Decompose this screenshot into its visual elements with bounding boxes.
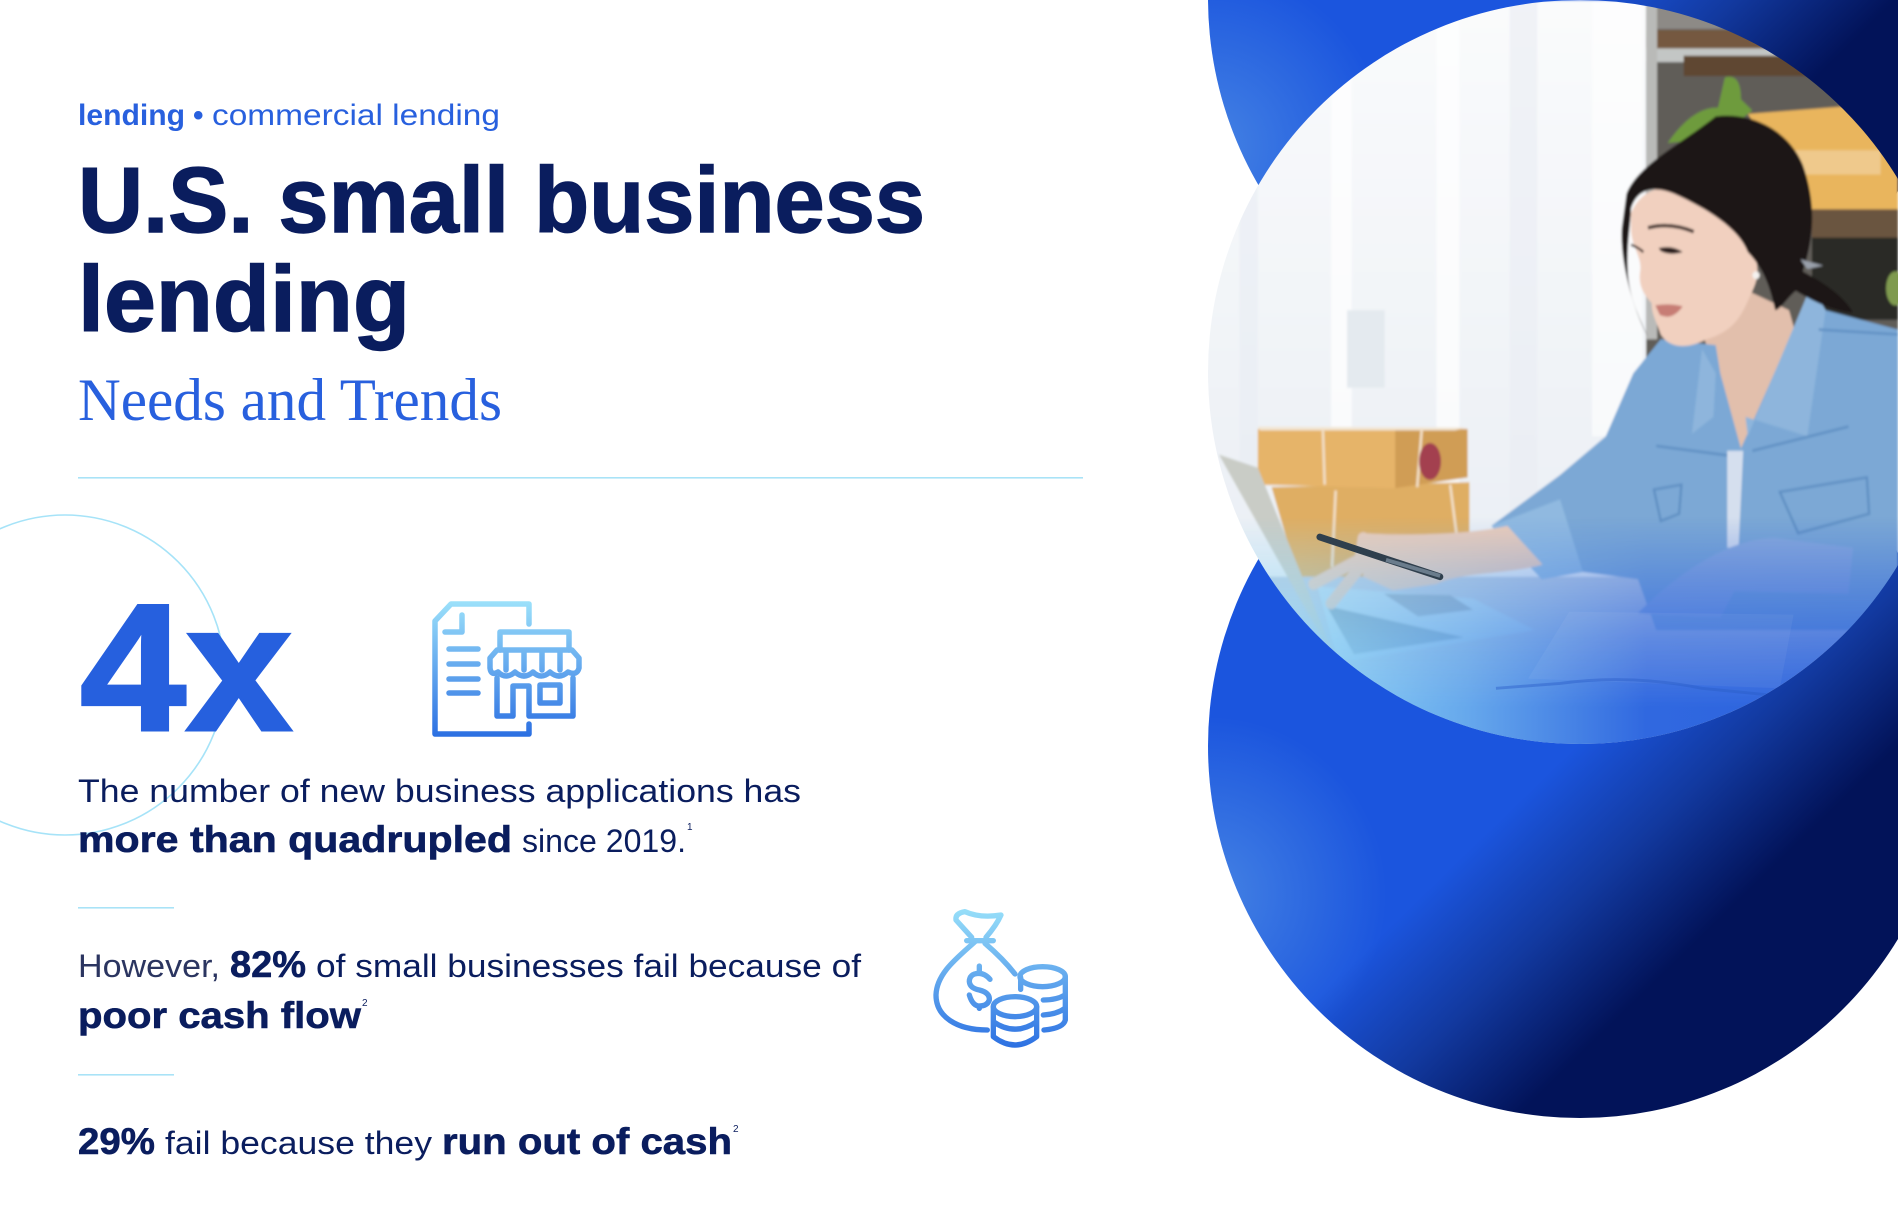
top blue circle <box>1208 0 1898 370</box>
subtitle: Needs and Trends <box>78 367 502 433</box>
text: poor cash flow: poor cash flow <box>78 995 361 1036</box>
photo: woman working at laptop with parcels <box>1180 0 1898 760</box>
text: run out of cash: run out of cash <box>442 1121 732 1162</box>
text: poor cash flow <box>78 944 861 1036</box>
category label: commercial lending <box>212 99 500 132</box>
title: lending <box>78 247 410 351</box>
category label <box>78 99 500 132</box>
text: poor cash flow: 82% <box>230 944 306 985</box>
text: new business applications: 1 <box>687 822 693 833</box>
text: run out of cash <box>78 1121 739 1162</box>
text: new business applications: The number of new business applications has <box>78 773 801 809</box>
category label: • <box>193 99 204 132</box>
icon: money bag and coins <box>936 912 1065 1045</box>
parcels <box>1272 482 1469 582</box>
table and laptop <box>1269 575 1848 744</box>
big stat: 4x: 4x <box>80 567 292 769</box>
text: run out of cash: fail because they <box>165 1125 432 1161</box>
text: new business applications: since 2019. <box>522 823 686 859</box>
icon: document and storefront <box>435 604 579 734</box>
lower blue circle <box>1208 374 1898 1118</box>
text: run out of cash: 2 <box>733 1124 739 1135</box>
decorative circle outline <box>0 515 225 835</box>
category label: lending <box>78 99 185 132</box>
text: run out of cash: 29% <box>78 1121 155 1162</box>
title <box>78 148 925 351</box>
text: poor cash flow: However, <box>78 948 220 984</box>
blue fade overlay <box>1244 524 1898 744</box>
text: new business applications: more than quadrupled <box>78 819 512 860</box>
title: U.S. small business <box>78 148 925 252</box>
text: poor cash flow: 2 <box>362 998 368 1009</box>
woman <box>1697 291 1796 451</box>
text: new business applications <box>78 773 801 860</box>
text: poor cash flow: of small businesses fail because of <box>316 948 861 984</box>
